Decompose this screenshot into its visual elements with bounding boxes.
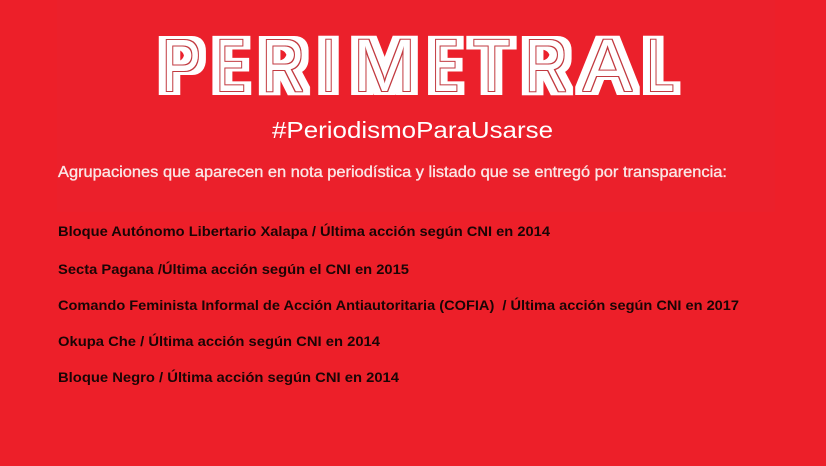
item: Bloque Negro: Bloque Negro / Última acción según CNI en 2014: [58, 368, 399, 386]
title: I: [322, 24, 335, 107]
item: Bloque Autónomo Libertario Xalapa: Bloque Autónomo Libertario Xalapa / Última acción según CNI en 2014: [58, 222, 550, 240]
item: COFIA: Comando Feminista Informal de Acción Antiautoritaria (COFIA) / Última acción según CNI en 2017: [58, 296, 739, 314]
top panel: [57, 0, 775, 212]
list of groups: [58, 222, 739, 386]
title: R: [525, 24, 568, 107]
title: E: [433, 24, 458, 107]
title: R: [262, 24, 305, 107]
item: Okupa Che: Okupa Che / Última acción según CNI en 2014: [58, 332, 380, 350]
title: M: [353, 24, 416, 107]
title: A: [583, 24, 633, 107]
title: P: [162, 24, 201, 107]
title: [162, 24, 674, 107]
item: Secta Pagana: Secta Pagana /Última acción según el CNI en 2015: [58, 260, 409, 278]
subheading: Agrupaciones que aparecen en nota periodística y listado que se entregó por transparencia:: [58, 164, 727, 181]
title: T: [473, 24, 510, 107]
title: L: [647, 24, 674, 107]
title: E: [217, 24, 245, 107]
hashtag: #PeriodismoParaUsarse: [272, 117, 553, 143]
